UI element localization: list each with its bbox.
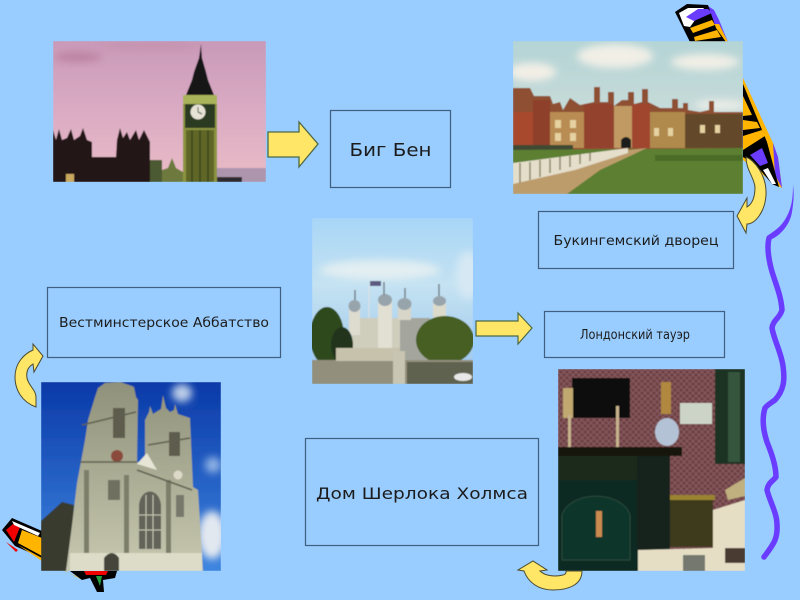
photo: Buckingham palace xyxy=(508,41,746,194)
box: Tower of London: Лондонский тауэр xyxy=(580,328,690,343)
arrow: to Tower xyxy=(476,313,532,344)
photo: Sherlock Holmes room xyxy=(558,369,745,571)
box: Sherlock Holmes house: Дом Шерлока Холмса xyxy=(316,484,528,503)
photo: Westminster Abbey xyxy=(41,382,226,571)
photo: Big Ben xyxy=(53,41,266,182)
box: Sherlock Holmes house xyxy=(306,438,538,546)
box: Big Ben: Биг Бен xyxy=(350,140,432,161)
box: Buckingham palace: Букингемский дворец xyxy=(554,234,719,249)
box: Tower of London xyxy=(544,312,724,358)
photo: Tower of London xyxy=(310,218,480,384)
arrow: to Big Ben xyxy=(268,122,318,167)
box: Big Ben xyxy=(330,110,450,188)
icon: pencil top right xyxy=(675,4,782,188)
icon: purple squiggle xyxy=(763,185,794,557)
arrow: curved to Sherlock box xyxy=(518,561,582,590)
arrow: curved to Westminster xyxy=(15,344,43,407)
box: Westminster Abbey: Вестминстерское Аббатство xyxy=(59,315,269,331)
icon: pencil bottom left xyxy=(2,518,117,592)
box: Buckingham palace xyxy=(538,212,734,268)
box: Westminster Abbey xyxy=(48,288,280,358)
arrow: curved to Buckingham xyxy=(737,157,766,233)
